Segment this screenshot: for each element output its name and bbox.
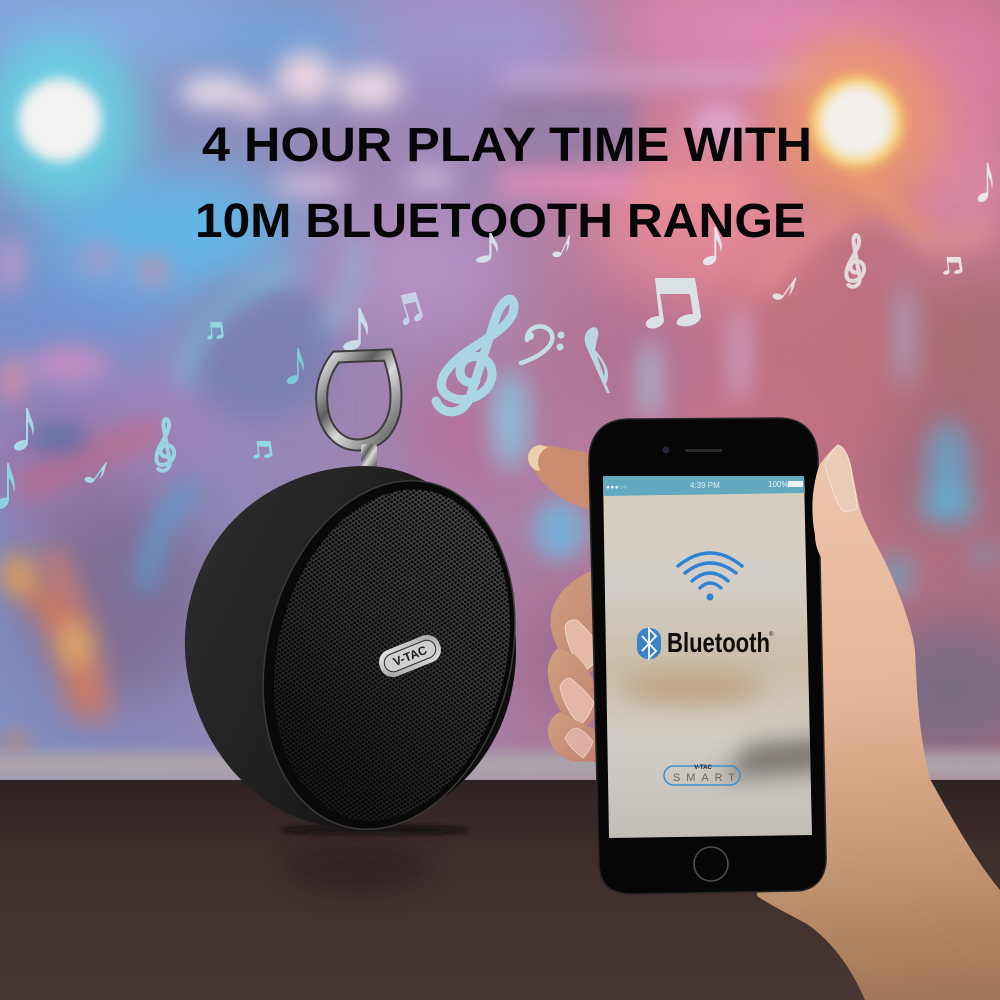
speaker logo plate: [375, 631, 445, 681]
icon: large treble clef: [436, 299, 514, 412]
hanging ring: [322, 355, 396, 468]
little finger: [548, 712, 596, 762]
ring finger: [548, 648, 602, 727]
beamed notes: [207, 257, 963, 459]
bokeh and stage structure: [500, 95, 635, 165]
home button: [694, 847, 728, 881]
icon: bluetooth rune: [637, 628, 661, 659]
speaker body: [185, 466, 516, 828]
index finger: [528, 445, 600, 512]
status bar: ●●●○○: [606, 484, 628, 491]
floor: [0, 780, 1000, 1000]
phone: [589, 418, 830, 894]
status bar: 4:39 PM: [690, 481, 720, 490]
speaker reflection: [280, 826, 470, 894]
title: [195, 119, 812, 248]
single notes: [0, 163, 993, 509]
speaker grille: [241, 464, 543, 846]
thumbnail: [825, 445, 857, 511]
status bar: 100%: [768, 480, 788, 489]
screen photo blur: [620, 672, 830, 778]
music notes: [0, 163, 993, 509]
arm and palm: [757, 445, 1000, 1000]
orange stage glow: [10, 575, 85, 715]
V-TAC Smart logo: SMART: [673, 772, 735, 784]
phone body: [589, 418, 826, 894]
status bar: [603, 476, 805, 496]
icon: small treble clef left: [139, 418, 188, 473]
icon: small treble clef right: [829, 234, 878, 289]
background: blurred concert scene: [0, 0, 1000, 782]
phone speaker and camera: [662, 446, 722, 454]
title line 2: 10M BLUETOOTH RANGE: [195, 195, 806, 248]
icon: bass clef: [521, 326, 564, 363]
middle finger: [550, 568, 609, 673]
phone screen: [603, 476, 812, 838]
speaker logo plate: V-TAC: [391, 643, 429, 669]
thumb over phone: [812, 445, 862, 600]
speaker front rim: [228, 454, 550, 856]
speaker: [185, 355, 550, 856]
hand behind phone: [528, 445, 1000, 1000]
icon: wifi: [678, 553, 742, 600]
bluetooth logo: Bluetooth: [667, 627, 770, 658]
title line 1: 4 HOUR PLAY TIME WITH: [202, 119, 812, 172]
bluetooth logo: ®: [769, 631, 774, 638]
V-TAC Smart logo: V-TAC: [694, 765, 712, 771]
bluetooth logo: [637, 627, 774, 659]
V-TAC Smart logo: [664, 765, 740, 785]
stage lights: [0, 32, 947, 212]
